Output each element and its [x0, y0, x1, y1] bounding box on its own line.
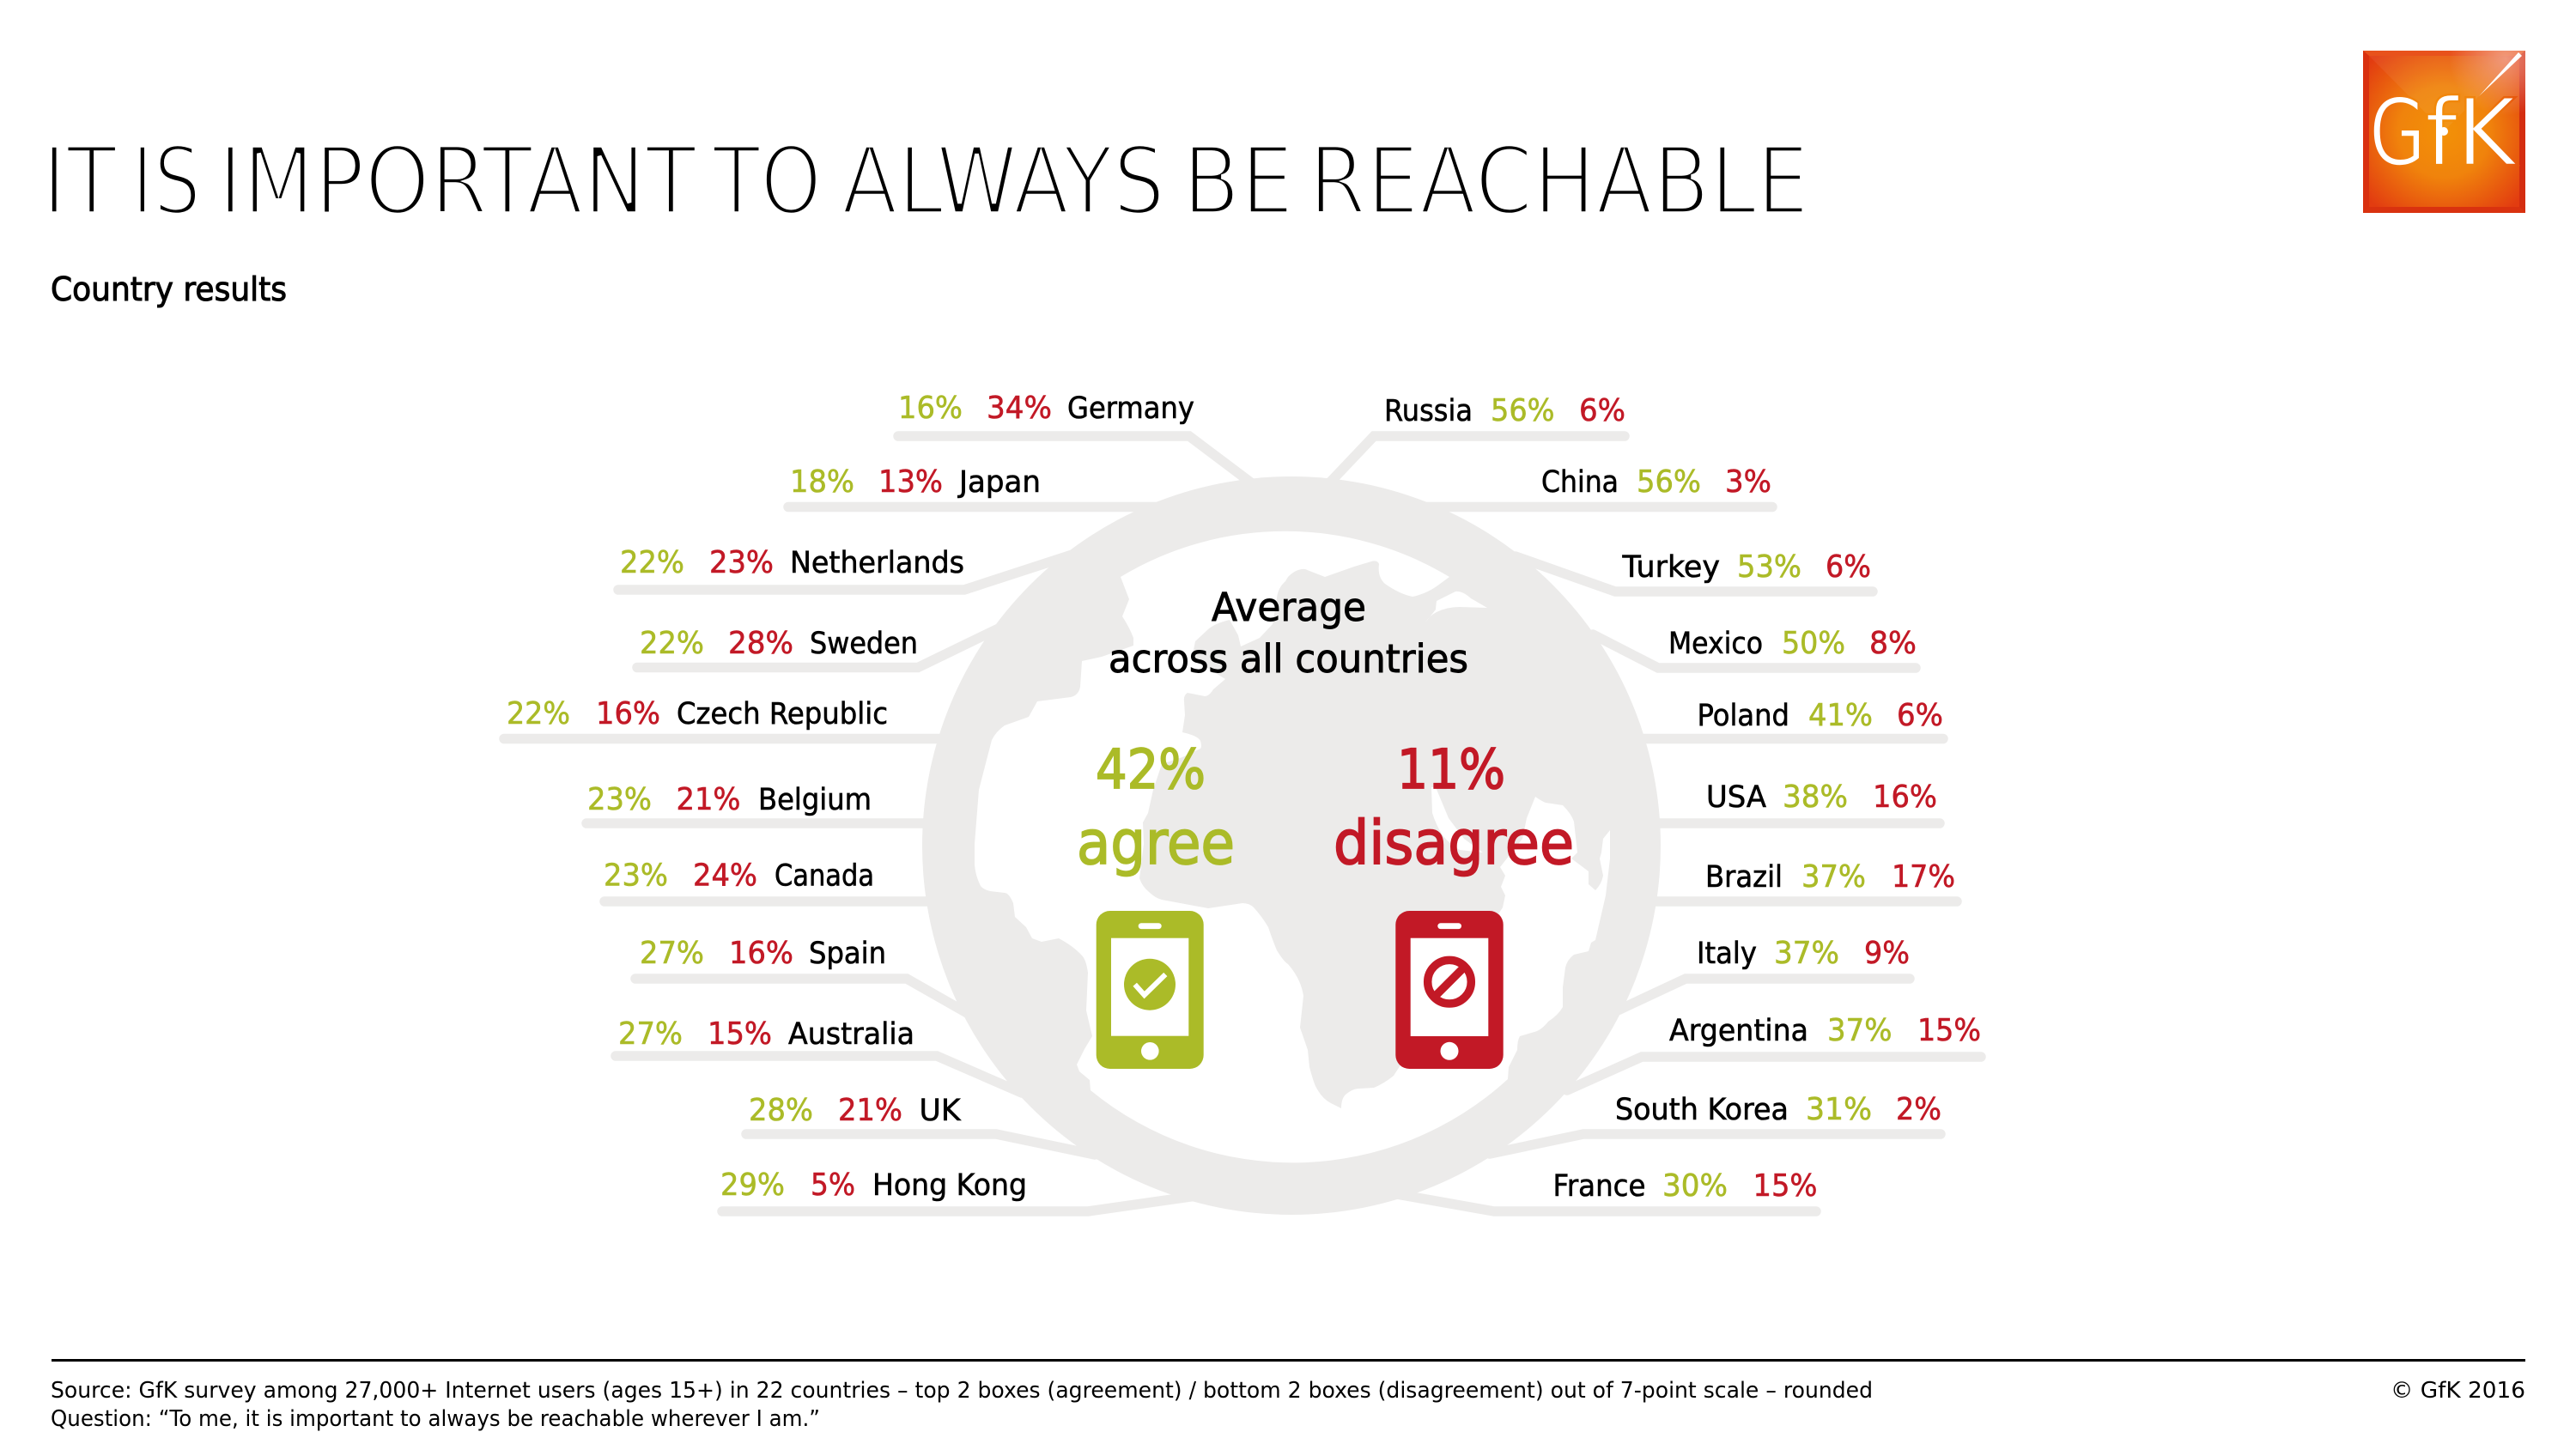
row: South Korea: 2% [1896, 1092, 1941, 1127]
row: Japan: 18% [790, 464, 854, 500]
row: Spain [635, 936, 975, 1017]
title: BE [1182, 126, 1294, 236]
stat: 42% agree: agree [1077, 808, 1235, 878]
title: TO [712, 126, 822, 236]
row: USA: 16% [1873, 780, 1937, 815]
row: Brazil: Brazil [1705, 860, 1783, 895]
row: Mexico: Mexico [1668, 627, 1763, 661]
row: South Korea [1490, 1092, 1941, 1154]
stat: 42% agree [1077, 738, 1235, 878]
logo: GfK: K [2457, 80, 2518, 187]
icon: phone with check mark [1097, 911, 1204, 1069]
logo: GfK [2363, 51, 2525, 213]
title: IMPORTANT [218, 126, 697, 236]
row: Belgium: Belgium [758, 783, 872, 817]
row: Brazil [1644, 859, 1957, 901]
row: Belgium [586, 782, 945, 823]
row: Russia: 56% [1491, 393, 1554, 428]
row: Sweden [637, 626, 1000, 668]
title: IT [42, 126, 118, 236]
row: Italy: 9% [1864, 936, 1910, 971]
row: France: 15% [1753, 1168, 1817, 1204]
row: Czech Republic: 22% [507, 696, 570, 731]
row: Argentina: 37% [1827, 1013, 1893, 1048]
row: Mexico: 8% [1869, 626, 1917, 661]
row: USA [1644, 780, 1940, 823]
row: Poland [1640, 698, 1943, 738]
row: Australia: Australia [788, 1017, 914, 1052]
row: France [1382, 1168, 1817, 1211]
row: Japan [788, 464, 1202, 507]
row: France: France [1552, 1169, 1645, 1204]
icon: phone with prohibition sign [1395, 911, 1504, 1069]
row: Italy: 37% [1774, 936, 1839, 971]
row: Sweden: 22% [640, 626, 704, 661]
row: Brazil: 17% [1892, 859, 1955, 895]
row: Germany: 16% [898, 391, 963, 426]
row: Hong Kong [720, 1168, 1202, 1211]
row: Belgium: 23% [587, 782, 652, 817]
row: Sweden: Sweden [810, 627, 918, 661]
row: Australia: 15% [708, 1016, 772, 1052]
row: Germany [898, 391, 1255, 486]
panel: right country results [1327, 393, 1981, 1211]
title: ALWAYS [841, 126, 1165, 236]
row: Brazil: 37% [1801, 859, 1866, 895]
footnote: source and question [51, 1378, 1873, 1432]
stat: 11% disagree [1334, 738, 1574, 878]
globe [922, 476, 1661, 1215]
title: IS [131, 126, 201, 236]
row: Spain: 27% [640, 936, 704, 971]
row: Hong Kong: Hong Kong [872, 1168, 1027, 1203]
title: REACHABLE [1309, 126, 1809, 236]
logo: GfK: G [2369, 80, 2426, 187]
row: Russia [1327, 393, 1625, 486]
row: Japan: 13% [878, 464, 943, 500]
heading: average across all countries: across all countries [1109, 636, 1468, 682]
row: Mexico [1593, 626, 1917, 668]
title [42, 126, 1809, 236]
row: Australia [616, 1016, 1022, 1093]
row: UK: 21% [838, 1093, 902, 1128]
row: Canada: Canada [775, 858, 874, 893]
row: Netherlands: 23% [709, 545, 774, 580]
row: China: China [1541, 465, 1619, 500]
row: Argentina: Argentina [1669, 1014, 1808, 1048]
row: Canada [604, 858, 945, 901]
row: USA: USA [1706, 780, 1766, 815]
row: Czech Republic: 16% [596, 696, 660, 731]
row: UK: 28% [749, 1093, 813, 1128]
row: Canada: 23% [604, 858, 668, 893]
row: Italy: Italy [1697, 937, 1757, 971]
row: Spain: Spain [809, 937, 886, 971]
row: Canada: 24% [693, 858, 757, 893]
row: Spain: 16% [729, 936, 793, 971]
row: Japan: Japan [957, 465, 1041, 500]
stat: 11% disagree: 11% [1397, 738, 1505, 801]
row: Netherlands [618, 545, 1078, 590]
row: Turkey: 53% [1737, 549, 1801, 585]
row: Germany: 34% [987, 391, 1052, 426]
row: Germany: Germany [1067, 391, 1194, 426]
copyright: © GfK 2016 [2391, 1378, 2525, 1404]
row: Mexico: 50% [1782, 626, 1845, 661]
heading: average across all countries [1109, 585, 1468, 682]
row: Sweden: 28% [728, 626, 793, 661]
row: Czech Republic: Czech Republic [677, 697, 888, 731]
row: UK [746, 1093, 1095, 1155]
subtitle: Country results [51, 270, 287, 308]
row: USA: 38% [1783, 780, 1848, 815]
row: UK: UK [919, 1094, 962, 1128]
row: Poland: 41% [1808, 698, 1873, 733]
row: Poland: Poland [1697, 699, 1789, 733]
footer rule [52, 1359, 2525, 1362]
footnote: source and question: Question: “To me, it is important to always be reachable wherever I am.” [51, 1406, 820, 1432]
panel: left country results [504, 391, 1255, 1211]
row: Australia: 27% [618, 1016, 683, 1052]
row: Netherlands: Netherlands [790, 546, 964, 580]
logo: GfK: f [2425, 80, 2460, 187]
row: Poland: 6% [1897, 698, 1943, 733]
row: Belgium: 21% [677, 782, 740, 817]
row: Argentina [1567, 1013, 1981, 1090]
row: Turkey: Turkey [1622, 550, 1720, 585]
row: Hong Kong: 5% [811, 1168, 855, 1203]
row: Czech Republic [504, 696, 953, 738]
row: China: 3% [1725, 464, 1771, 500]
row: South Korea: South Korea [1615, 1093, 1789, 1127]
row: Turkey [1516, 549, 1873, 592]
row: France: 30% [1662, 1168, 1728, 1204]
row: Argentina: 15% [1917, 1013, 1981, 1048]
footnote: source and question: Source: GfK survey among 27,000+ Internet users (ages 15+) in 22 countries – top 2 boxes (agreement) / bottom 2 boxes (disagreement) out of 7-point scale – rounded [51, 1378, 1873, 1404]
row: China [1374, 464, 1772, 507]
row: China: 56% [1637, 464, 1701, 500]
stat: 42% agree: 42% [1096, 738, 1206, 801]
row: Italy [1619, 936, 1910, 1010]
row: Russia: 6% [1579, 393, 1625, 428]
row: Russia: Russia [1384, 394, 1473, 428]
row: Turkey: 6% [1826, 549, 1871, 585]
row: Hong Kong: 29% [720, 1168, 785, 1203]
row: Netherlands: 22% [620, 545, 684, 580]
heading: average across all countries: Average [1212, 585, 1366, 630]
row: South Korea: 31% [1806, 1092, 1872, 1127]
stat: 11% disagree: disagree [1334, 808, 1574, 878]
